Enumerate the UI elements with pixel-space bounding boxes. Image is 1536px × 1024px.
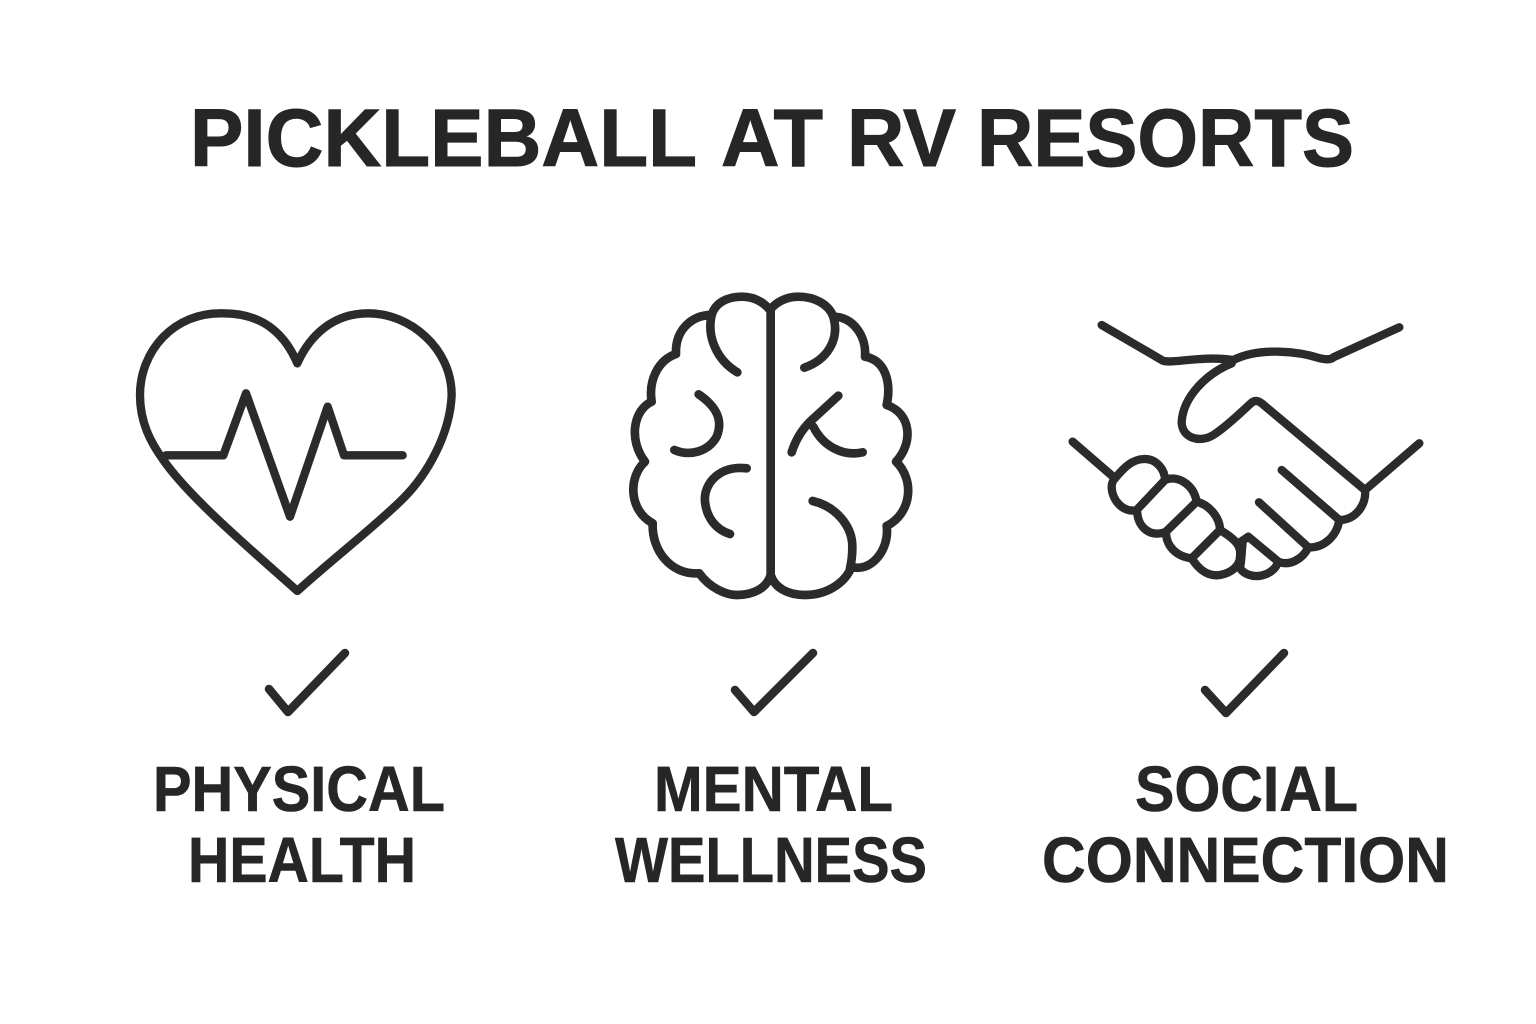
label: mental wellness: WELLNESS	[615, 824, 927, 896]
title: RV	[847, 93, 956, 184]
label: social connection: SOCIAL	[1135, 753, 1358, 825]
title: AT	[721, 93, 823, 184]
icon: brain	[633, 297, 908, 595]
label: physical health	[153, 753, 445, 896]
icon: check mark	[1205, 653, 1284, 713]
column: social connection	[1042, 325, 1449, 896]
title: RESORTS	[977, 93, 1354, 184]
column: physical health	[140, 313, 452, 896]
label: social connection: CONNECTION	[1042, 824, 1449, 896]
column: mental wellness	[615, 297, 927, 896]
icon: check mark	[735, 653, 813, 712]
label: mental wellness: MENTAL	[654, 753, 893, 825]
icon: heart with pulse line	[140, 313, 452, 591]
label: physical health: HEALTH	[188, 824, 416, 896]
icon: handshake	[1073, 325, 1419, 576]
title	[190, 93, 1354, 184]
label: social connection	[1042, 753, 1449, 896]
label: physical health: PHYSICAL	[153, 753, 445, 825]
title: PICKLEBALL	[190, 93, 697, 184]
icon: check mark	[269, 653, 345, 712]
label: mental wellness	[615, 753, 927, 896]
